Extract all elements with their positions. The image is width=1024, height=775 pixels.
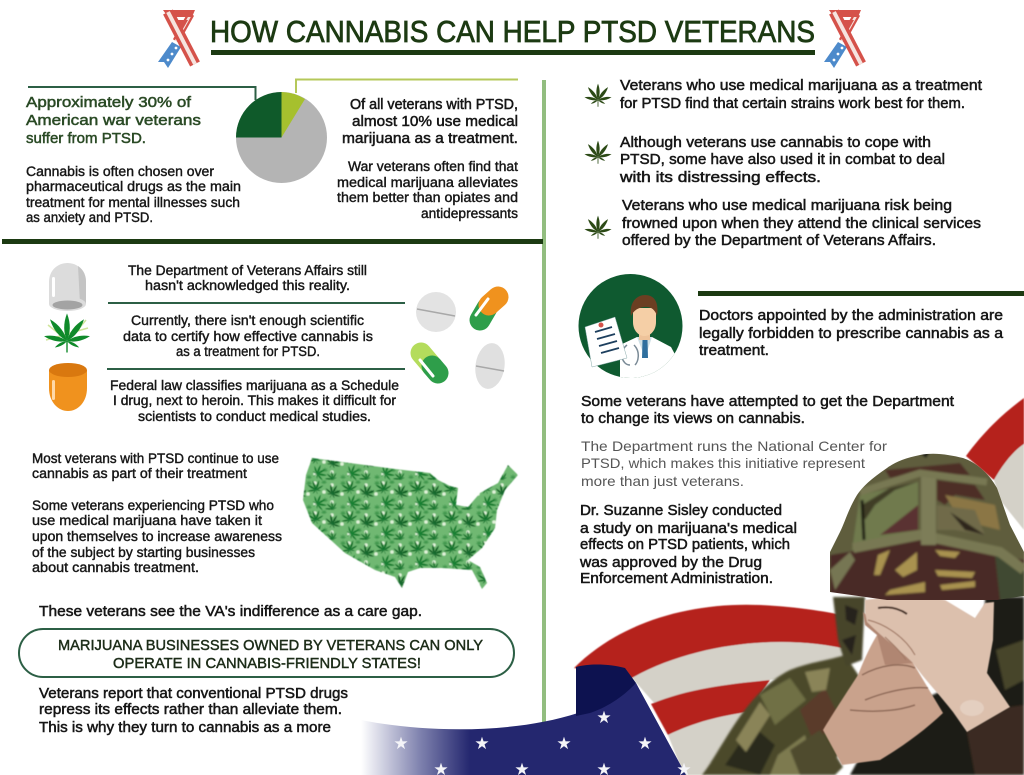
icon: right ribbon (824, 10, 861, 68)
text: combat: Although veterans use cannabis to cope with (620, 135, 931, 151)
icon: leaf bullet 1 (584, 84, 612, 107)
text: conventional drugs: repress its effects rather than alleviate them. (39, 702, 342, 718)
text: attempts to change views (581, 394, 954, 427)
icon: leaf bullet 2 (584, 141, 612, 164)
panel: doctors forbidden (698, 291, 1024, 359)
title: HOW CANNABIS CAN HELP PTSD VETERANS (210, 15, 815, 49)
panel: 10 percent statistic: antidepressants (421, 206, 518, 221)
text: Dr. Sisley study: Dr. Suzanne Sisley conducted (580, 503, 782, 519)
text: National Center for PTSD (581, 438, 887, 489)
text: National Center for PTSD: PTSD, which makes this initiative represent (581, 455, 865, 471)
callout: businesses only in friendly states (19, 629, 514, 677)
panel: 30 percent statistic: suffer from PTSD. (26, 130, 146, 147)
icon: pills (416, 292, 508, 391)
text: strains (620, 78, 982, 112)
text: frowned upon: frowned upon when they attend the clinical services (622, 216, 981, 232)
panel: VA and federal law facts: scientists to conduct medical studies. (138, 409, 371, 424)
panel: veterans starting businesses: of the subject by starting businesses (32, 545, 255, 560)
illustration: American flag: ★ (474, 734, 490, 753)
illustration: flag stripes (574, 398, 1024, 775)
text: Dr. Sisley study (579, 503, 797, 587)
text: combat: with its distressing effects. (619, 170, 821, 186)
panel: doctors forbidden: treatment. (699, 343, 769, 359)
panel: veterans starting businesses (32, 451, 282, 575)
panel: 10 percent statistic: marijuana as a treatment. (342, 131, 518, 147)
callout: businesses only in friendly states: MARIJUANA BUSINESSES OWNED BY VETERANS CAN ONLY (58, 637, 483, 654)
panel: VA and federal law facts: The Department of Veterans Affairs still (128, 263, 367, 278)
illustration: American flag: ★ (596, 708, 612, 727)
icon: left ribbon (158, 10, 195, 68)
text: frowned upon: Veterans who use medical marijuana risk being (622, 198, 952, 214)
panel: veterans starting businesses: use medical marijuana have taken it (32, 513, 262, 528)
text: frowned upon (622, 198, 981, 249)
pie chart (236, 92, 327, 183)
icon: capsule with cannabis leaf (44, 263, 90, 411)
panel: 30 percent statistic (26, 87, 256, 225)
panel: 30 percent statistic: pharmaceutical drugs as the main (26, 179, 241, 194)
panel: VA and federal law facts: as a treatment for PTSD. (176, 344, 320, 359)
panel: VA and federal law facts: I drug, next to heroin. This makes it difficult for (113, 393, 397, 408)
soldier helmet (825, 450, 1024, 602)
text: Dr. Sisley study: effects on PTSD patients, which (580, 537, 790, 553)
callout: businesses only in friendly states: OPERATE IN CANNABIS-FRIENDLY STATES! (113, 655, 421, 672)
illustration: American flag (361, 664, 692, 775)
panel: VA and federal law facts: hasn't acknowledged this reality. (145, 278, 350, 293)
panel: VA and federal law facts: Currently, there isn't enough scientific (131, 313, 364, 328)
panel: doctors forbidden: Doctors appointed by the administration are (699, 308, 1003, 324)
panel: 10 percent statistic (296, 80, 518, 221)
text: Dr. Sisley study: Enforcement Administration. (580, 571, 773, 587)
text: attempts to change views: to change its views on cannabis. (581, 411, 805, 427)
panel: veterans starting businesses: cannabis as part of their treatment (32, 466, 247, 481)
panel: doctors forbidden: legally forbidden to prescribe cannabis as a (699, 326, 1004, 342)
vertical divider (542, 80, 546, 725)
text: Dr. Sisley study: a study on marijuana's medical (580, 521, 797, 537)
panel: 30 percent statistic: American war veterans (26, 112, 201, 129)
panel: veterans starting businesses: about cannabis treatment. (32, 560, 199, 575)
icon: leaf bullet 3 (584, 216, 612, 239)
US map made of cannabis leaves (303, 458, 518, 589)
panel: VA and federal law facts (107, 263, 405, 424)
panel: 30 percent statistic: as anxiety and PTSD. (26, 210, 153, 225)
text: care gap: These veterans see the VA's indifference as a care gap. (39, 604, 422, 620)
panel: 30 percent statistic: Approximately 30% of (26, 94, 192, 111)
panel: veterans starting businesses: upon themselves to increase awareness (32, 529, 282, 544)
text: attempts to change views: Some veterans have attempted to get the Department (581, 394, 954, 410)
text: combat (619, 135, 945, 186)
text: conventional drugs (39, 686, 348, 736)
panel: 10 percent statistic: Of all veterans with PTSD, (350, 97, 518, 113)
text: combat: PTSD, some have also used it in combat to deal (620, 152, 945, 168)
panel: 10 percent statistic: medical marijuana alleviates (337, 175, 518, 190)
text: Dr. Sisley study: was approved by the Drug (579, 555, 762, 571)
text: strains: for PTSD find that certain strains work best for them. (620, 96, 965, 112)
text: conventional drugs: This is why they turn to cannabis as a more (39, 720, 331, 736)
panel: 10 percent statistic: almost 10% use medical (352, 114, 518, 130)
panel: veterans starting businesses: Most veterans with PTSD continue to use (32, 451, 279, 466)
text: frowned upon: offered by the Department of Veterans Affairs. (622, 233, 936, 249)
text: National Center for PTSD: The Department runs the National Center for (581, 438, 887, 454)
panel: VA and federal law facts: Federal law classifies marijuana as a Schedule (110, 378, 399, 393)
panel: 10 percent statistic: War veterans often find that (348, 159, 518, 174)
soldier body (702, 597, 1024, 775)
soldier hands (823, 597, 1010, 765)
illustration: soldier covering his face (702, 450, 1024, 775)
panel: 10 percent statistic: them better than opiates and (337, 190, 518, 205)
panel: veterans starting businesses: Some veterans experiencing PTSD who (32, 498, 274, 513)
panel: VA and federal law facts: data to certify how effective cannabis is (123, 329, 373, 344)
illustration: American flag: ★ (556, 734, 572, 753)
text: strains: Veterans who use medical marijuana as a treatment (620, 78, 982, 94)
icon: doctor (578, 274, 682, 385)
illustration: American flag: ★ (637, 734, 653, 753)
text: National Center for PTSD: more than just veterans. (581, 473, 744, 489)
text: conventional drugs: Veterans report that conventional PTSD drugs (39, 686, 348, 702)
panel: 30 percent statistic: treatment for mental illnesses such (26, 195, 240, 210)
illustration: American flag: ★ (393, 734, 409, 753)
panel: 30 percent statistic: Cannabis is often chosen over (26, 164, 215, 179)
horizontal divider (2, 239, 543, 244)
